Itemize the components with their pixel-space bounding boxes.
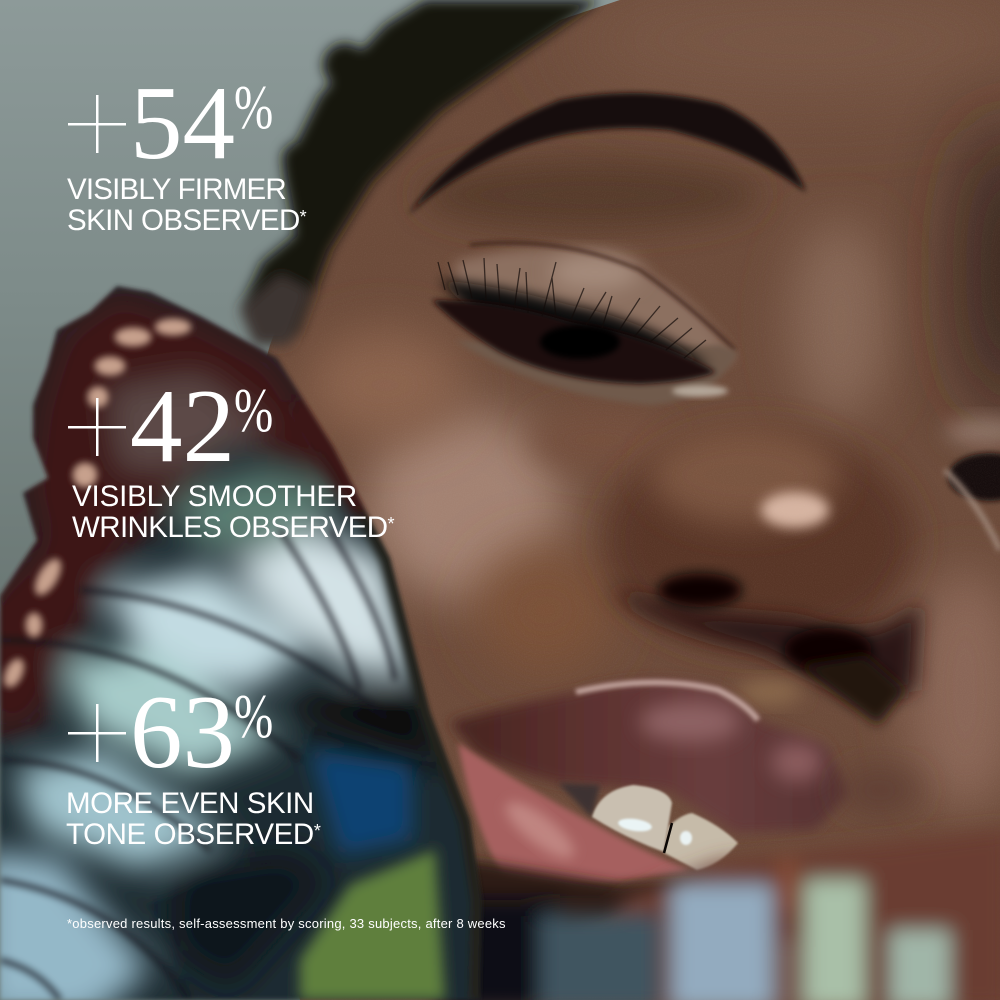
number: +42%: % [234,377,273,445]
wing rim [333,447,482,1000]
number: +42% [68,367,273,484]
lip corner shadow [854,766,920,812]
upper cheek [305,330,465,440]
tooth gap [664,823,672,853]
temple bright [790,220,890,420]
wing edge spots [0,319,191,690]
teeth [592,785,672,852]
label: more even skin tone [66,787,321,851]
cheek highlight [365,410,565,600]
upper lip [450,680,850,833]
green patch [300,850,445,1000]
stat 2 [68,367,394,544]
number: +63%: % [234,683,273,751]
face skin [268,0,1000,1000]
under nose shadow [610,590,920,700]
butterfly wing [0,283,482,1000]
number: +42%: 42 [130,367,235,484]
label: visibly smoother [72,480,394,544]
label: visibly firmer [67,173,306,237]
mid cheek [475,545,615,675]
forehead tone [626,0,974,83]
skin grain [574,180,999,574]
label: visibly smoother: WRINKLES OBSERVED* [72,511,394,544]
number: +63% [68,673,273,790]
eyelid [451,244,727,348]
dark lower [170,850,330,990]
stat 1 [67,64,306,237]
dark centre [280,680,445,770]
label: visibly firmer: SKIN OBSERVED* [67,204,306,237]
lower lip [458,743,690,887]
lid crease [470,243,735,350]
number: +54%: % [234,74,273,142]
green panel [170,470,340,550]
lashes [438,258,706,358]
eyebrow [408,93,806,215]
nostrils [658,573,742,607]
right shadow [965,120,1000,420]
pale blue panels [230,530,412,675]
lower lid [455,340,738,405]
nose [605,430,915,650]
nose highlight [761,492,829,528]
eye opening [432,300,716,384]
number: +54% [68,64,273,181]
wing veins [0,530,395,1000]
tooth highlights [617,817,653,833]
label: more even skin tone: TONE OBSERVED* [66,818,320,851]
chin shadow [475,854,685,926]
number: +63%: 63 [130,673,235,790]
number: +54%: 54 [130,64,235,181]
hair [240,0,600,345]
right eye [945,418,1000,446]
blue patch [310,750,412,855]
label: visibly smoother: VISIBLY SMOOTHER [72,480,357,513]
maroon edge band [0,286,360,740]
blurred foreground wing: bottom right [440,828,1000,1000]
label: visibly firmer: VISIBLY FIRMER [67,173,286,206]
lash band [440,280,712,368]
stat 3 [66,673,321,851]
mouth shadow [558,783,600,818]
right cheek [905,570,1000,810]
shade under brow [420,160,760,230]
footnote: *observed results, self-assessment by scoring, 33 subjects, after 8 weeks [67,916,506,931]
philtrum [738,680,802,704]
label: more even skin tone: MORE EVEN SKIN [66,787,314,820]
